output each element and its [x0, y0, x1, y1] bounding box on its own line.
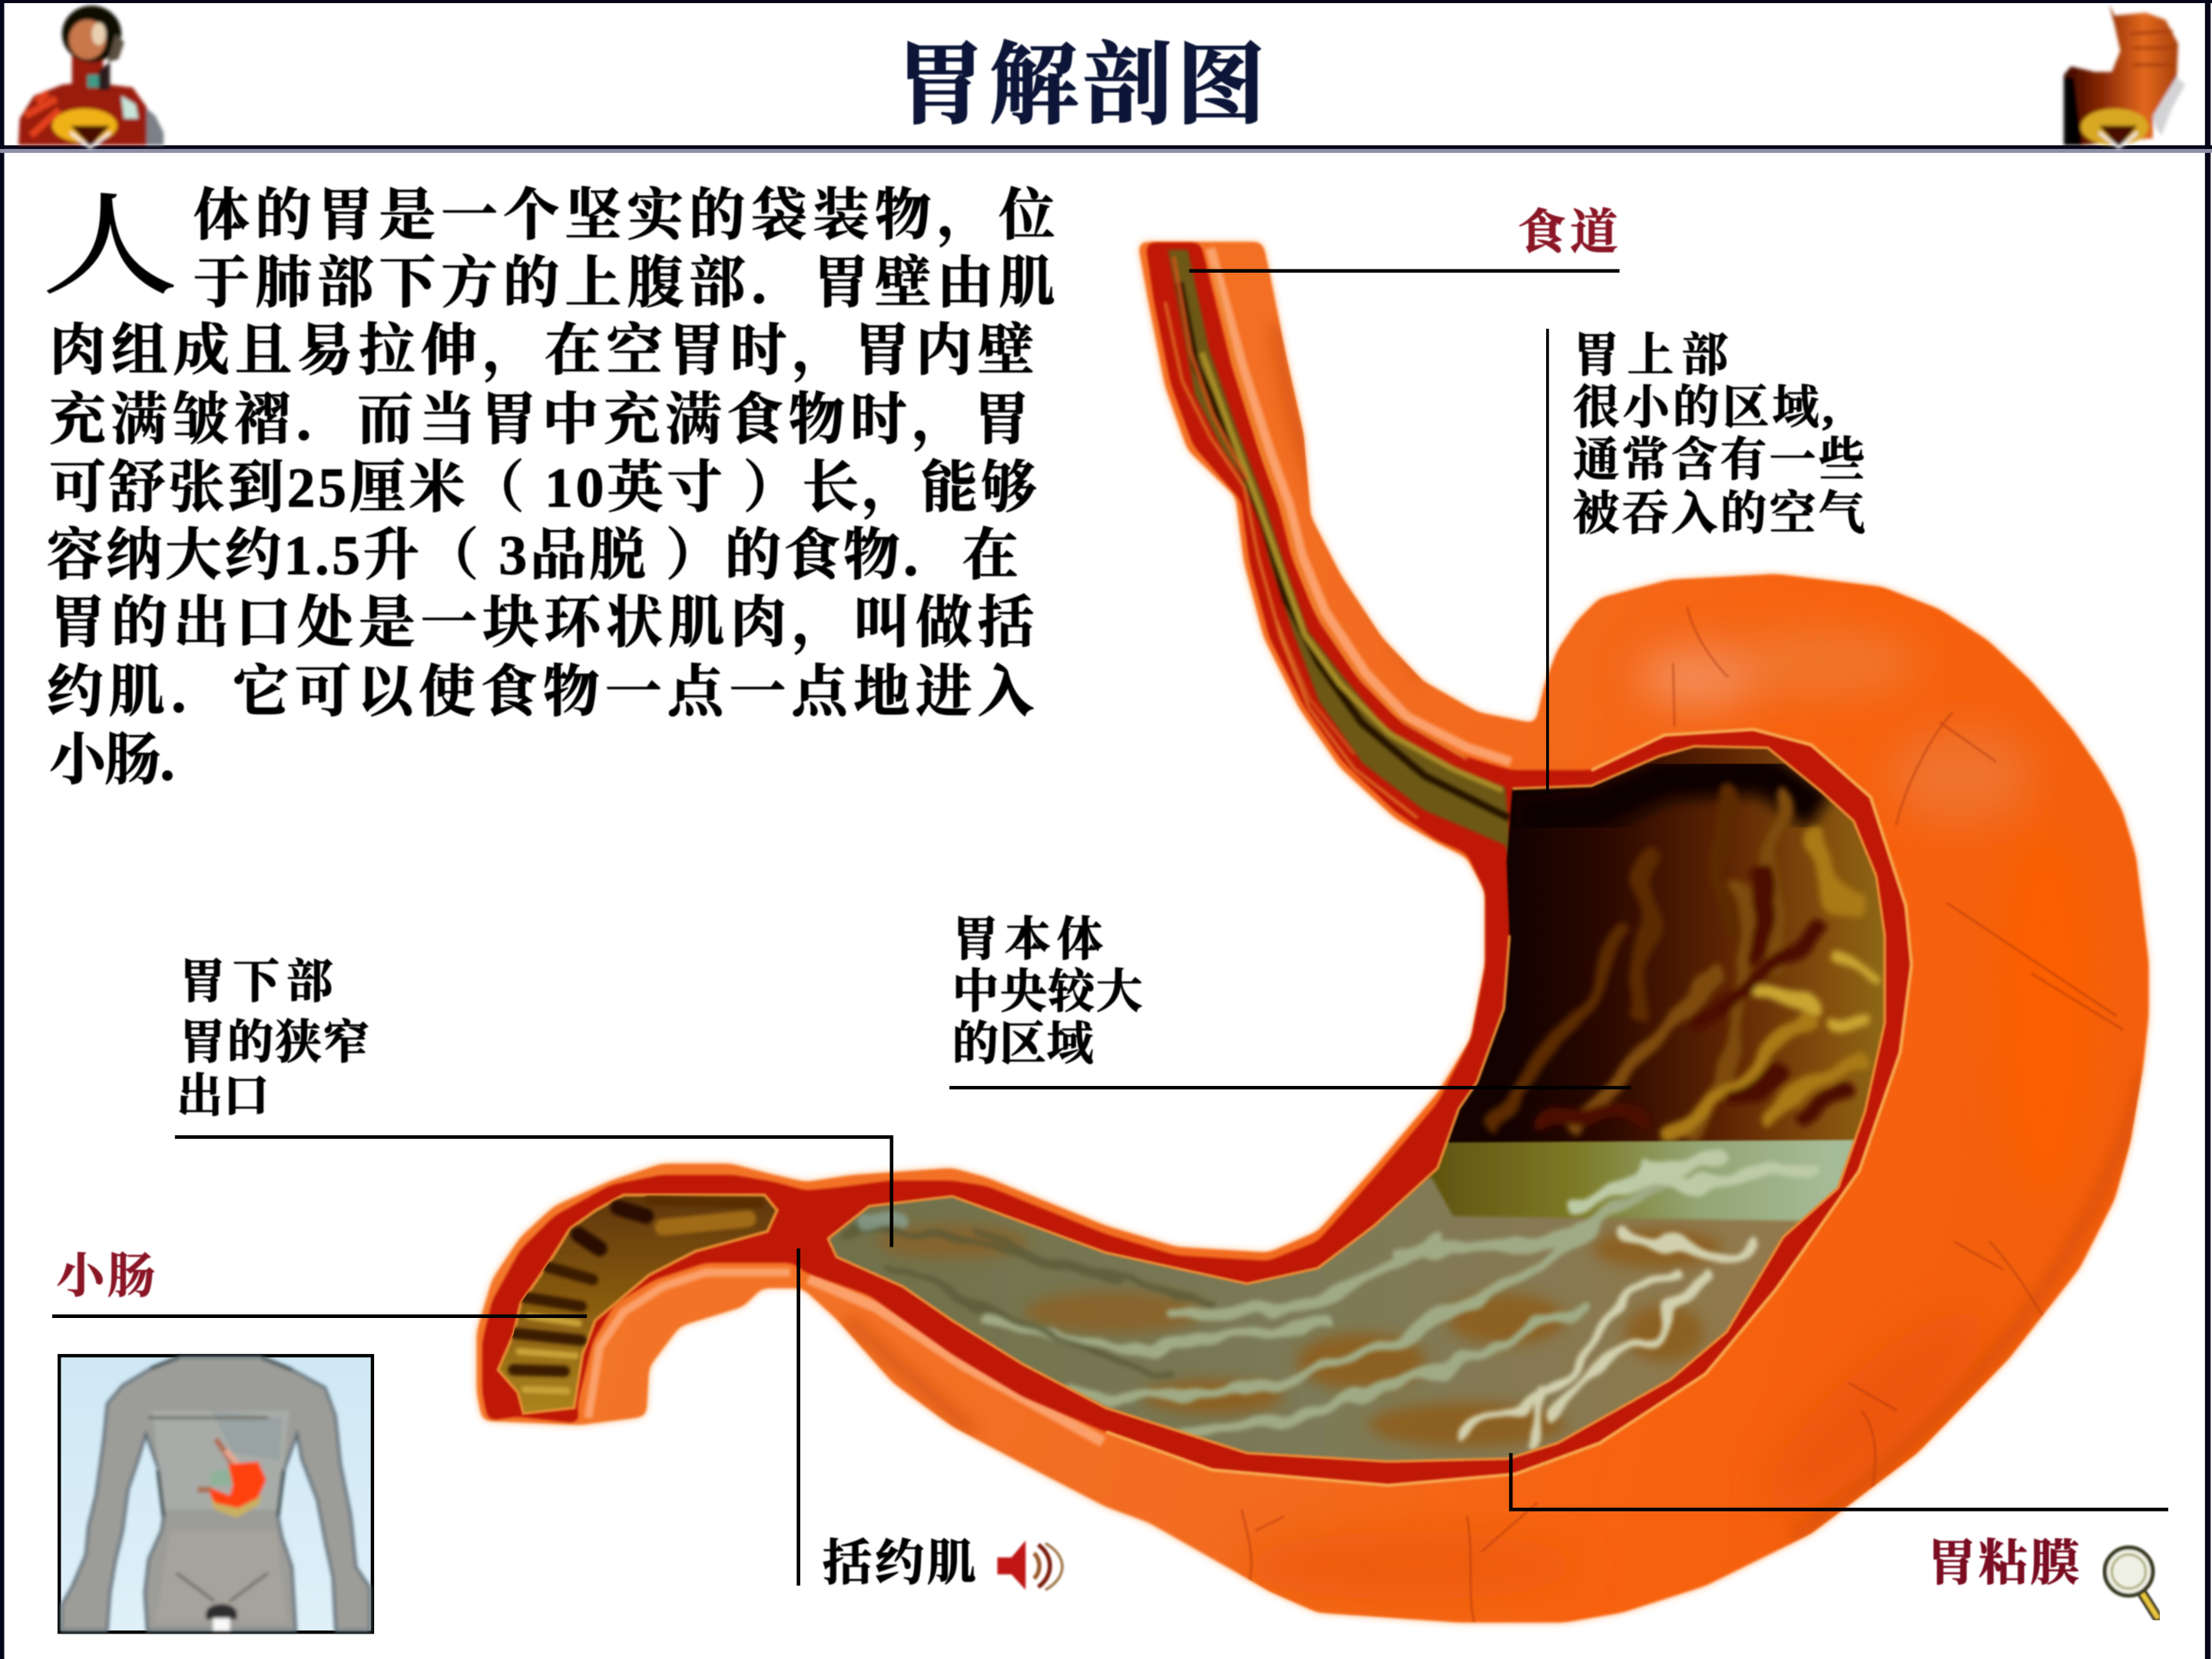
intro text block: 胃的出口处是一块环状肌肉，叫做括	[49, 592, 1034, 655]
soft peach halo around silhouette	[477, 242, 2148, 1622]
esophagus lumen	[1165, 250, 1512, 863]
label: fundus: 胃上部	[1573, 330, 1728, 382]
title: 胃解剖图	[896, 38, 1266, 136]
icon: small stomach	[2064, 5, 2185, 148]
intro text block: 于肺部下方的上腹部．胃壁由肌	[194, 252, 1055, 314]
intro text block	[47, 184, 1055, 791]
intro text block: 肉组成且易拉伸，在空胃时，胃内壁	[49, 320, 1034, 382]
stomach illustration	[477, 242, 2148, 1622]
drop cap: 人	[42, 185, 177, 308]
intro text block: 容纳大约1.5升（ 3品脱 ）的食物．在	[47, 525, 1018, 587]
label: gastric mucosa	[1511, 1453, 2168, 1591]
label: pylorus region	[175, 957, 892, 1247]
red muscle wall cross-section	[482, 243, 1912, 1485]
label: pylorus region: 胃的狭窄	[179, 1018, 369, 1069]
label: stomach body	[949, 914, 1631, 1088]
label: fundus: 很小的区域,	[1573, 382, 1834, 434]
label: fundus: 通常含有一些	[1573, 435, 1865, 486]
skin shading and vessels	[588, 248, 2144, 1622]
icon: anatomy figure	[18, 5, 164, 148]
pale outer edge of the wall	[1106, 730, 1912, 1485]
label: sphincter: 括约肌	[823, 1536, 976, 1591]
label: fundus: 被吞入的空气	[1573, 488, 1866, 540]
label: fundus	[1548, 329, 1866, 793]
label: stomach body: 的区域	[952, 1018, 1093, 1070]
duodenum lumen	[498, 1195, 777, 1413]
outer stomach wall silhouette	[477, 242, 2148, 1622]
label: stomach body: 中央较大	[952, 966, 1143, 1018]
pale lower folds	[846, 1153, 1813, 1442]
lumen pale edge	[828, 747, 1885, 1462]
icon: magnifying glass	[2104, 1548, 2157, 1617]
stomach lumen with rugae folds	[830, 745, 1885, 1462]
green band	[1411, 1140, 1862, 1227]
inset: body locator	[59, 1356, 373, 1632]
human body figure	[61, 1357, 369, 1631]
upper folds	[1495, 790, 1876, 1128]
intro text block: 充满皱褶．而当胃中充满食物时，胃	[49, 389, 1030, 452]
intro text block: 约肌．它可以使食物一点一点地进入	[47, 661, 1034, 724]
label: pylorus region: 胃下部	[179, 957, 333, 1008]
lower lumen	[790, 1178, 1862, 1495]
label: stomach body: 胃本体	[952, 914, 1103, 965]
pale skin strips beside the wall	[588, 248, 1511, 1442]
dark upper lumen shadow	[1516, 773, 1820, 818]
icon: speaker	[998, 1541, 1062, 1590]
intro text block: 体的胃是一个坚实的袋装物，位	[194, 184, 1055, 247]
intro text block: 可舒张到25厘米（ 10英寸 ）长，能够	[49, 456, 1037, 519]
label: small intestine: 小肠	[56, 1249, 155, 1303]
label: gastric mucosa: 胃粘膜	[1927, 1536, 2079, 1591]
intro text block: 小肠．	[49, 729, 216, 791]
label: pylorus region: 出口	[177, 1071, 270, 1122]
label: esophagus: 食道	[1518, 205, 1618, 259]
